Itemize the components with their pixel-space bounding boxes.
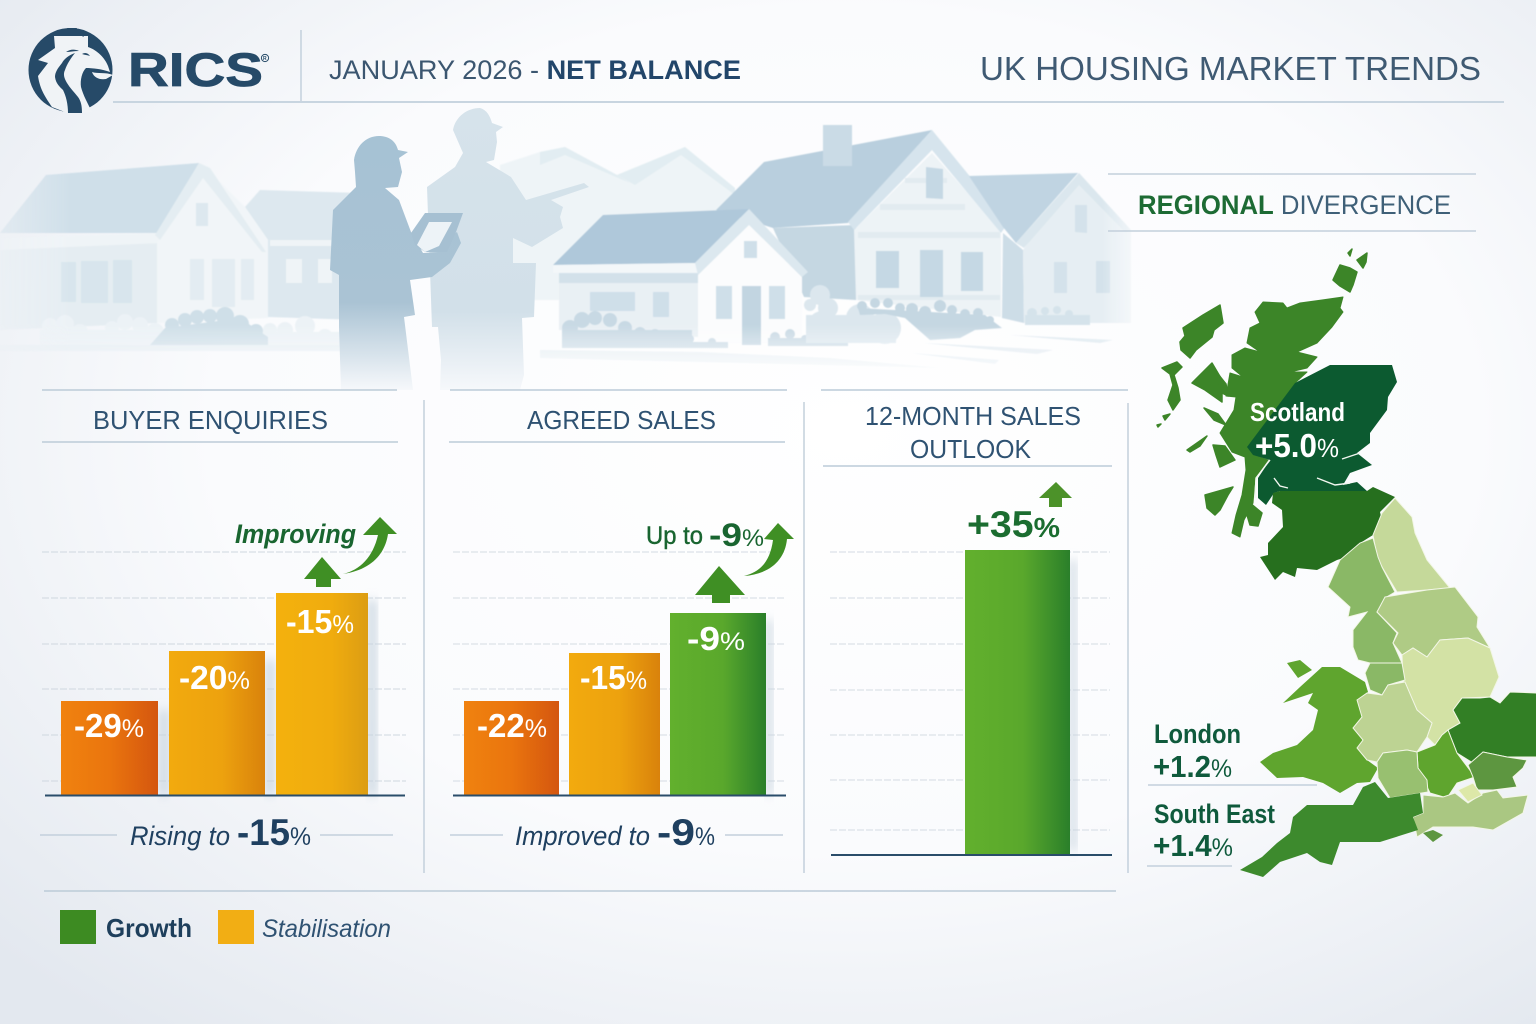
map: UK regions: [1157, 249, 1536, 877]
label: Scotland: +5.0%: [1255, 427, 1339, 464]
callout: up to -9%: -9: [709, 517, 742, 553]
map: Wales: [1260, 660, 1378, 793]
map: Greater London surrounds: [1468, 752, 1527, 790]
legend: growth: [60, 910, 192, 944]
legend: stabilisation: [218, 910, 391, 944]
map: firths: [1255, 453, 1360, 498]
house: left: [0, 163, 268, 330]
bushes: centre small: [768, 329, 848, 346]
arrow: curved up: [744, 523, 794, 576]
label: South East: [1147, 799, 1275, 866]
bushes: left mid: [150, 307, 268, 345]
label: Scotland: [1250, 397, 1345, 464]
map: south-east England: [1413, 790, 1528, 837]
label: South East: South East: [1154, 799, 1275, 829]
label: London: [1148, 719, 1317, 785]
heading: 12-month sales outlook: [865, 401, 1081, 464]
date heading: JANUARY 2026 - NET BALANCE: [329, 55, 741, 85]
map: north-west England: [1328, 538, 1402, 663]
header: [28, 28, 1504, 114]
callout: up to -9%: Up to: [646, 522, 703, 550]
callout: up to -9%: [646, 517, 764, 553]
label: South East: +1.4%: [1153, 828, 1233, 863]
label: London: London: [1154, 719, 1241, 749]
bushes: left pale: [108, 316, 340, 344]
house: back left: [245, 190, 360, 320]
caption: improved to -9%: [450, 812, 783, 853]
map: London: [1458, 783, 1482, 802]
caption: rising to -15%: [40, 812, 393, 853]
bar: outlook: [831, 550, 1112, 855]
bar chart: agreed sales: -9%: [687, 620, 745, 657]
bushes: far right: [1025, 306, 1090, 325]
map: Cheshire: [1365, 663, 1405, 695]
map: northern Scotland: [1220, 297, 1343, 537]
legend: growth: Growth: [106, 913, 192, 943]
map: southern Scotland: [1260, 487, 1395, 580]
arrow: up large: [695, 566, 745, 603]
map: north-east Scotland: [1247, 365, 1397, 505]
value: +35%: +35%: [967, 504, 1060, 545]
bushes: [40, 285, 1090, 348]
bushes: right cluster dark: [857, 298, 1002, 340]
arrow: curved up: [343, 517, 397, 574]
page title: UK HOUSING MARKET TRENDS: [980, 50, 1481, 87]
caption: improved to -9%: %: [695, 823, 715, 851]
house: right: [969, 173, 1131, 323]
figure: tablet: [411, 213, 463, 252]
map: south central: [1417, 730, 1475, 798]
caption: rising to -15%: Rising to: [130, 821, 230, 851]
map: west midlands: [1353, 682, 1432, 762]
panel: buyer enquiries: [40, 390, 406, 853]
map: east midlands: [1402, 638, 1499, 745]
bar chart: agreed sales: -22%: [477, 707, 547, 744]
arrow: up: [1039, 482, 1072, 507]
logo: RICS lion: [28, 28, 113, 114]
figure: surveyor with tablet: [330, 136, 461, 390]
caption: rising to -15%: -15: [237, 812, 290, 853]
map: Gloucestershire area: [1377, 750, 1428, 798]
bar chart: buyer enquiries: -20%: [179, 659, 250, 696]
map: Isle of Wight: [1423, 830, 1443, 842]
house: large central: [716, 125, 1008, 317]
heading: regional divergence: REGIONAL DIVERGENCE: [1138, 190, 1451, 220]
caption: rising to -15%: %: [290, 823, 311, 851]
map: scottish islands: [1157, 249, 1367, 526]
logo: wordmark: R: [263, 56, 267, 62]
houses: far background roofs: [500, 147, 735, 300]
bar chart: buyer enquiries: -29%: [74, 707, 144, 744]
caption: improved to -9%: Improved to: [515, 821, 650, 851]
label: London: +1.2%: [1153, 749, 1232, 784]
ground shadows: [110, 336, 1110, 363]
bar chart: buyer enquiries: -15%: [286, 603, 354, 640]
legend: stabilisation: Stabilisation: [262, 915, 391, 943]
panel: 12-month sales outlook: [821, 390, 1128, 855]
bushes: large pale: [804, 285, 901, 344]
panel: agreed sales: [449, 390, 794, 853]
map: north-east England: [1373, 498, 1450, 592]
label: Scotland: Scotland: [1250, 397, 1345, 427]
caption: improved to -9%: -9: [657, 812, 695, 853]
arrow: up small: [304, 557, 341, 587]
bar chart: agreed sales: -15%: [580, 659, 647, 696]
logo: wordmark: RICS: [128, 43, 263, 96]
map: south-west England: [1240, 782, 1423, 877]
callout: up to -9%: %: [742, 525, 764, 552]
heading: 12-month sales outlook: OUTLOOK: [910, 434, 1032, 464]
heading: buyer enquiries: BUYER ENQUIRIES: [93, 405, 328, 435]
map: east of England: [1448, 692, 1536, 763]
bushes: front cluster: [562, 311, 728, 348]
figure: surveyor holding pointer: [427, 108, 589, 390]
bar chart: agreed sales: [453, 613, 786, 796]
house: front small: [553, 209, 808, 345]
houses layer: [0, 125, 1131, 368]
illustration: houses and surveyors: [0, 108, 1131, 390]
legend: [60, 910, 391, 944]
map: Yorkshire: [1377, 587, 1490, 657]
bar chart: buyer enquiries: [45, 593, 405, 796]
heading: 12-month sales outlook: 12-MONTH SALES: [865, 401, 1081, 431]
heading: agreed sales: AGREED SALES: [527, 405, 716, 435]
callout: improving: Improving: [235, 519, 356, 549]
